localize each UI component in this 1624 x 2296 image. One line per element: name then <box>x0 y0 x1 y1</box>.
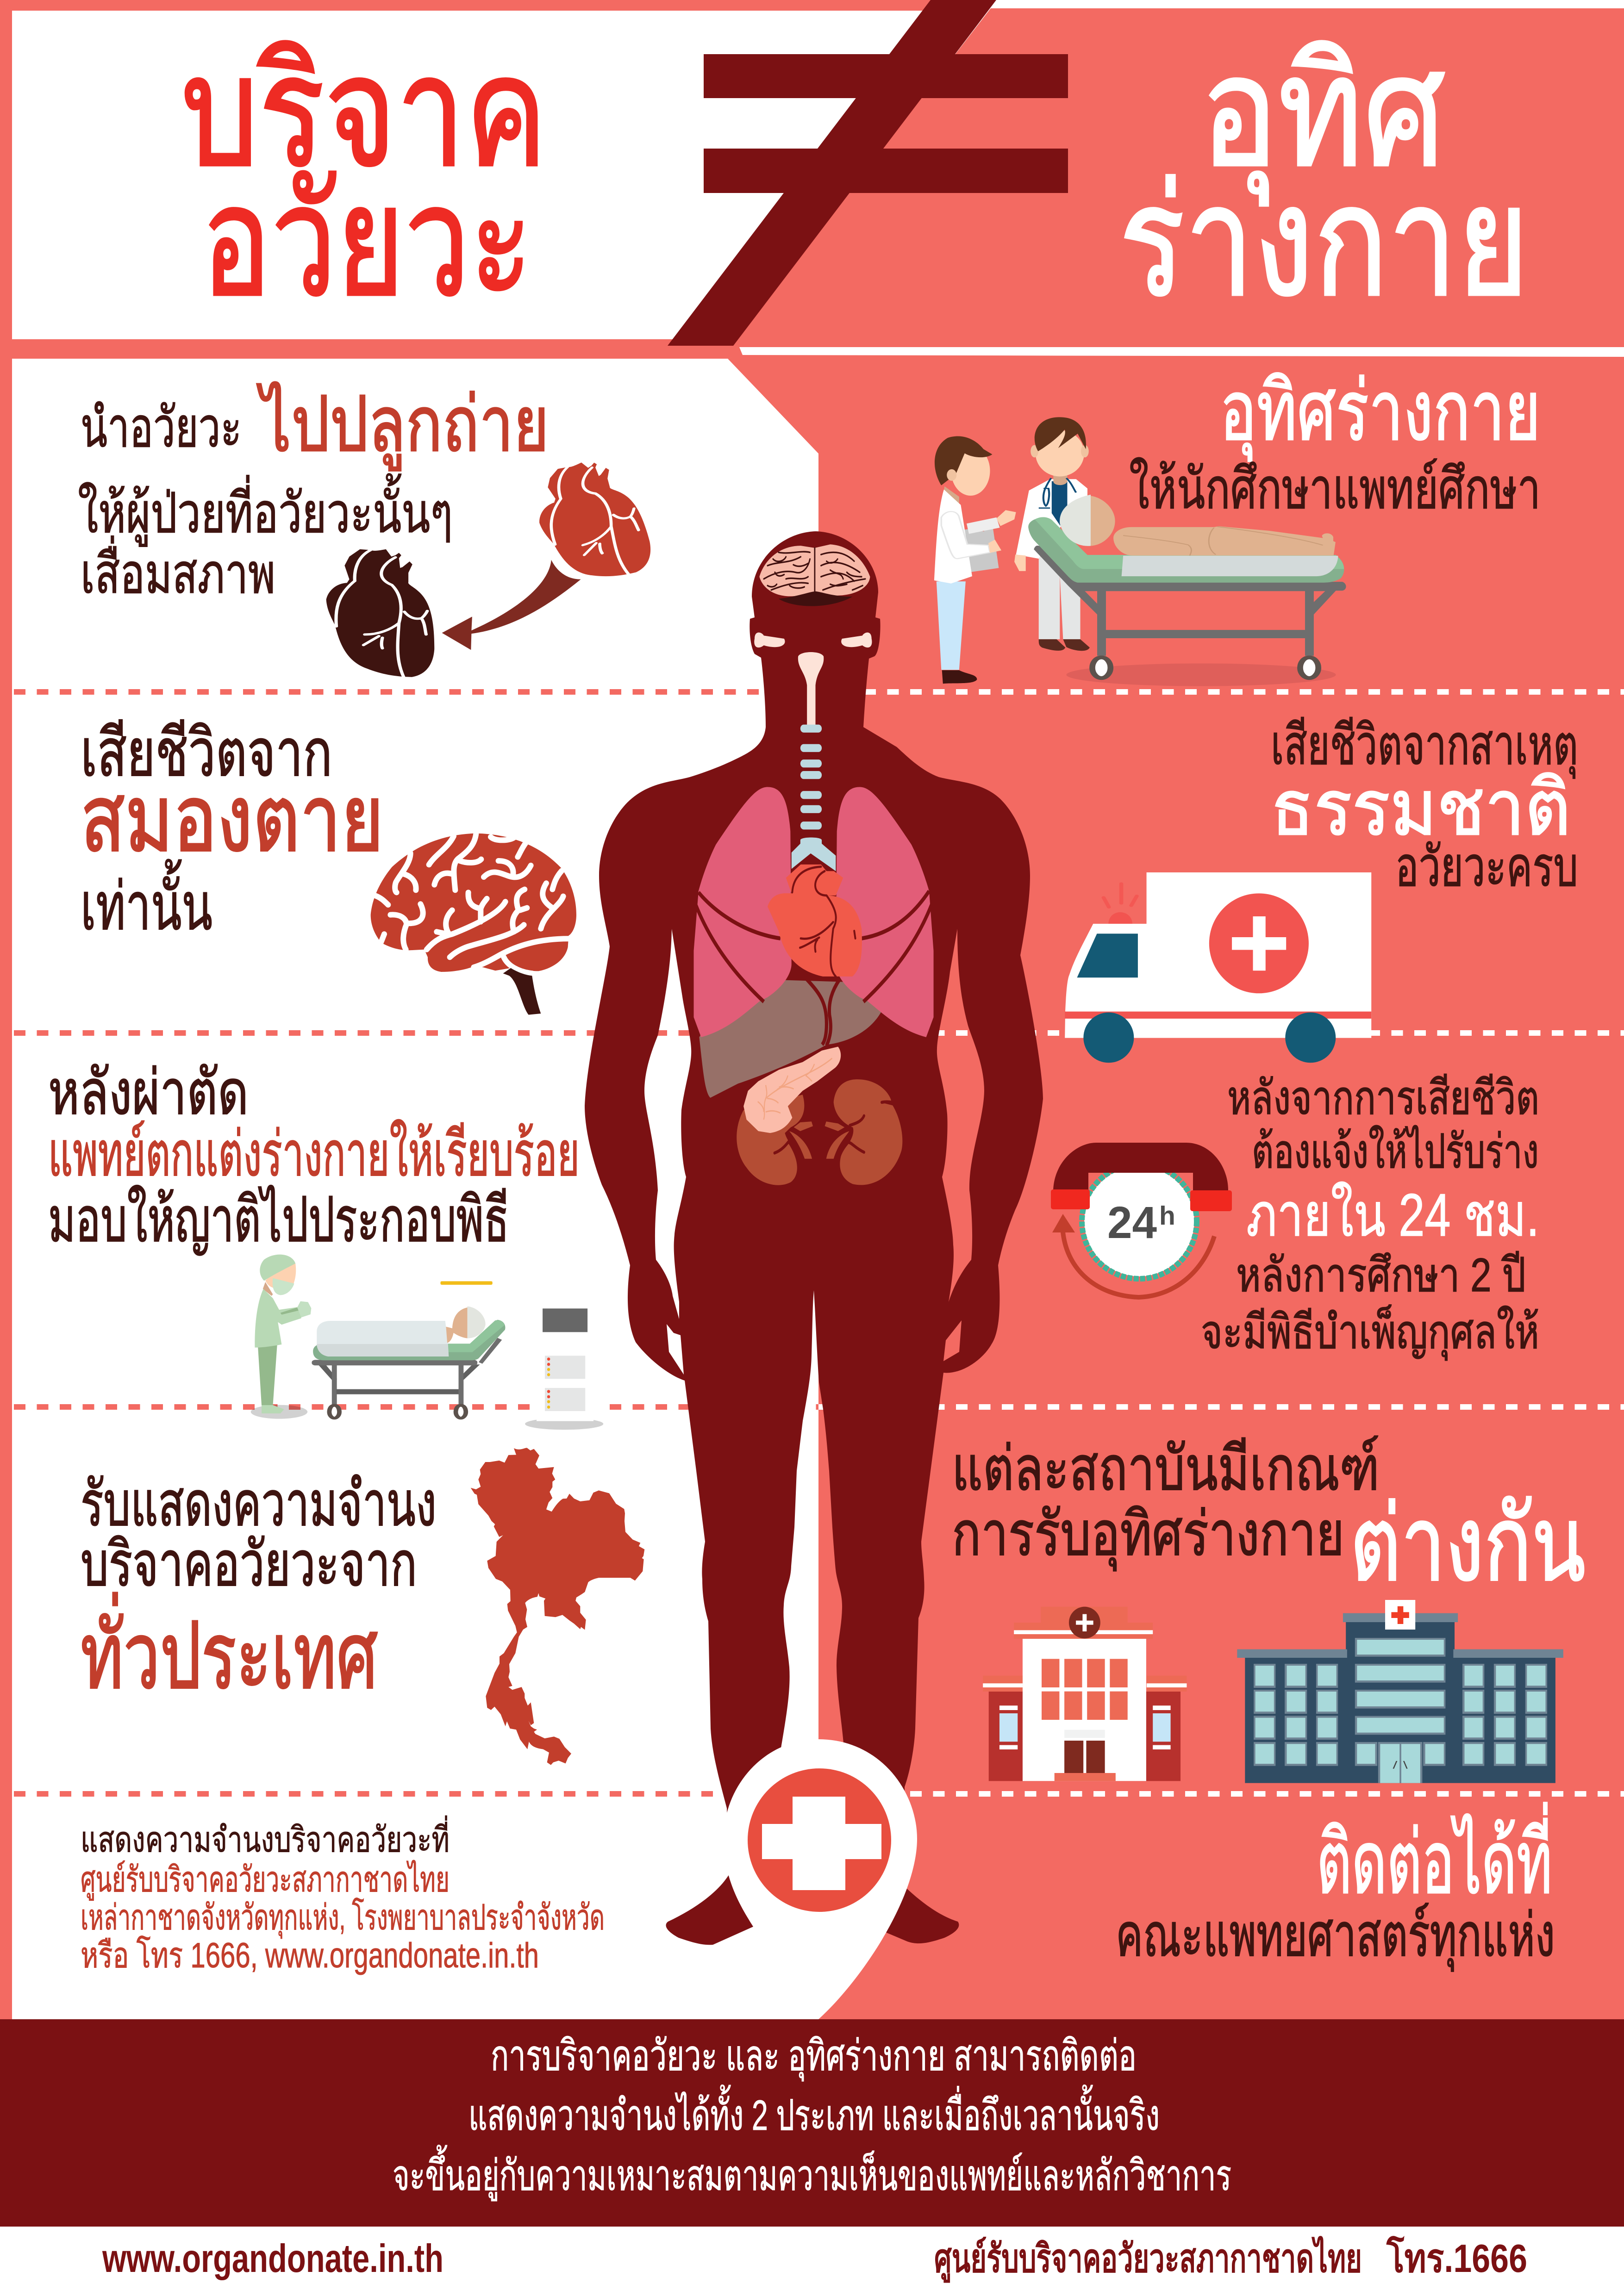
icon: not equal sign <box>668 0 1068 346</box>
text: section 3 left <box>48 1058 580 1256</box>
text: section 3 left: แพทย์ตกแต่งร่างกายให้เรียบร้อย <box>48 1119 580 1189</box>
dashed divider lines on right <box>818 692 1624 1794</box>
stretcher with body <box>1028 495 1346 686</box>
title: body donation: ร่างกาย <box>1119 155 1529 328</box>
organ: lung fissures and vessels <box>695 891 932 1045</box>
location pin with medical cross <box>724 1739 917 2019</box>
stretcher with patient <box>312 1307 505 1418</box>
doctor behind <box>1014 417 1090 651</box>
organ: left kidney <box>737 1095 813 1185</box>
text: bottom band message: การบริจาคอวัยวะ และ อุทิศร่างกาย สามารถติดต่อ <box>491 2032 1137 2082</box>
panel: right title coral block <box>729 8 1624 347</box>
text: section 1 left: ไปปลูกถ่าย <box>256 382 549 471</box>
icon: brain <box>371 834 576 1015</box>
text: section 1 left: ให้ผู้ป่วยที่อวัยวะนั้นๆ <box>78 473 453 547</box>
doctor in front <box>934 436 1016 684</box>
text: section 2 left: เสียชีวิตจาก <box>81 716 332 790</box>
icon: large hospital <box>1237 1600 1563 1783</box>
icon: healthy red heart <box>527 451 656 593</box>
text: section 5 left contact details: แสดงความจำนงบริจาคอวัยวะที่ <box>81 1816 450 1860</box>
text: section 4 left: ทั่วประเทศ <box>81 1593 378 1708</box>
text: section 2 right: ธรรมชาติ <box>1271 765 1571 851</box>
text: section 3 right <box>1201 1071 1539 1361</box>
organ: lungs <box>693 787 934 1037</box>
text: section 2 left: สมองตาย <box>81 767 384 871</box>
text: section 3 right: ภายใน 24 ชม. <box>1246 1181 1539 1249</box>
text: section 5 left contact details: เหล่ากาชาดจังหวัดทุกแห่ง, โรงพยาบาลประจำจังหวัด <box>81 1898 605 1939</box>
icon: small hospital <box>983 1607 1187 1781</box>
footer: website and contact: www.organdonate.in.th <box>102 2237 443 2281</box>
footer: website and contact: ศูนย์รับบริจาคอวัยวะสภากาชาดไทย <box>934 2236 1362 2283</box>
text: section 3 right: หลังจากการเสียชีวิต <box>1227 1071 1539 1124</box>
text: section 2 left: เท่านั้น <box>81 859 212 944</box>
panel: left white donation background frame <box>0 0 933 2019</box>
organ: throat <box>798 652 824 725</box>
title: organ donation: อวัยวะ <box>201 155 532 328</box>
human body silhouette <box>585 531 1043 1945</box>
text: section 3 right: หลังการศึกษา 2 ปี <box>1236 1249 1526 1301</box>
kidney vessels <box>775 1102 892 1153</box>
text: section 5 left contact details <box>81 1816 605 1975</box>
organ: trachea <box>792 725 836 871</box>
text: section 1 left: เสื่อมสภาพ <box>81 535 275 605</box>
title: body donation: อุทิศ <box>1200 25 1445 206</box>
organ: ear bones <box>754 633 872 647</box>
icon: 24 hour phone clock: 24 <box>1107 1197 1157 1248</box>
organ: right kidney <box>825 1079 902 1185</box>
medical monitor <box>440 1281 603 1430</box>
text: bottom band message: แสดงความจำนงได้ทั้ง 2 ประเภท และเมื่อถึงเวลานั้นจริง <box>468 2084 1160 2139</box>
icon: 24 hour phone clock <box>1051 1143 1232 1297</box>
text: section 1 left: นำอวัยวะ <box>81 397 242 459</box>
text: section 4 left: บริจาคอวัยวะจาก <box>81 1529 417 1599</box>
text: section 4 right: แต่ละสถาบันมีเกณฑ์ <box>952 1435 1380 1503</box>
text: section 5 right contact <box>1116 1803 1555 1972</box>
icon: 24 hour phone clock: h <box>1159 1201 1175 1231</box>
text: section 1 left <box>78 382 549 605</box>
icon: arrow <box>442 560 581 650</box>
organ: brain <box>759 544 870 606</box>
text: section 2 left <box>81 716 384 944</box>
illustration: doctors and body on stretcher <box>934 417 1346 686</box>
text: section 2 right <box>1271 714 1578 898</box>
text: bottom band message <box>393 2032 1231 2201</box>
panel: right coral body donation background <box>728 355 1624 2019</box>
dashed divider lines on left <box>14 692 818 1794</box>
organ: liver <box>699 979 886 1098</box>
text: section 4 right: การรับอุทิศร่างกาย <box>952 1500 1344 1571</box>
text: section 3 left: มอบให้ญาติไปประกอบพิธี <box>48 1185 509 1256</box>
text: section 1 right <box>1129 365 1541 520</box>
icon: ambulance <box>1065 872 1371 1063</box>
title: organ donation: บริจาค <box>181 25 547 198</box>
illustration: surgeon, patient and monitor <box>251 1255 603 1430</box>
icon: map of Thailand <box>471 1448 644 1765</box>
title: organ donation <box>181 25 547 328</box>
text: bottom band message: จะขึ้นอยู่กับความเหมาะสมตามความเห็นของแพทย์และหลักวิชาการ <box>393 2145 1231 2201</box>
footer: website and contact <box>102 2235 1527 2283</box>
text: section 5 left contact details: หรือ โทร 1666, www.organdonate.in.th <box>81 1935 539 1975</box>
icon: failed dark heart <box>326 549 434 677</box>
organ: heart <box>768 865 862 977</box>
text: section 4 left <box>81 1469 437 1708</box>
text: section 3 left: หลังผ่าตัด <box>48 1058 249 1127</box>
organs inside body <box>693 544 934 1098</box>
organ: pancreas <box>743 1047 841 1133</box>
text: section 5 left contact details: ศูนย์รับบริจาคอวัยวะสภากาชาดไทย <box>81 1860 450 1901</box>
abdominal organs <box>737 1047 902 1185</box>
title: body donation <box>1119 25 1529 328</box>
surgeon <box>251 1255 311 1419</box>
bottom band <box>0 2019 1624 2227</box>
footer: website and contact: โทร.1666 <box>1386 2235 1527 2281</box>
icons: healthy heart replaces failed heart <box>326 451 656 677</box>
text: section 4 right <box>952 1435 1586 1602</box>
text: section 4 left: รับแสดงความจำนง <box>81 1469 437 1539</box>
text: section 3 right: จะมีพิธีบำเพ็ญกุศลให้ <box>1201 1304 1539 1361</box>
